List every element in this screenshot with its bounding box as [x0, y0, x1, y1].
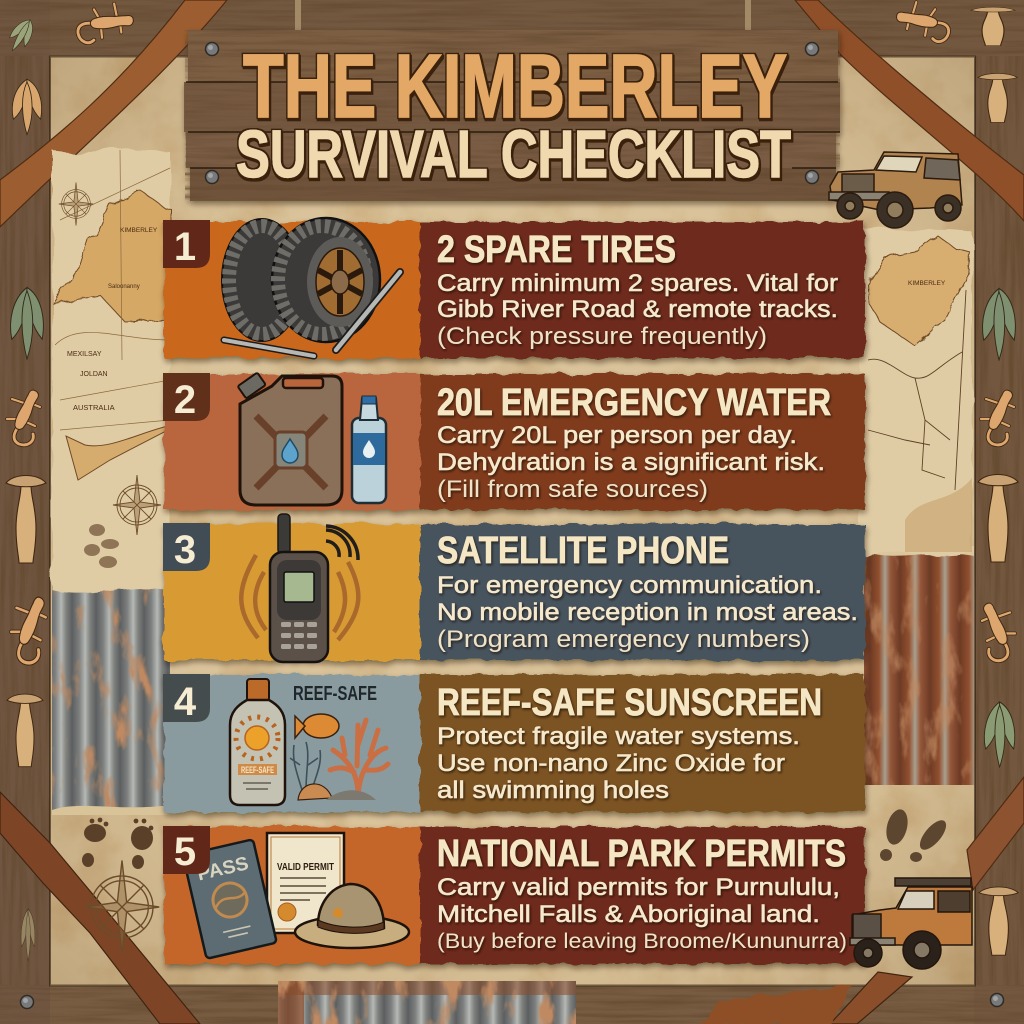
panel background: [164, 827, 865, 964]
text block: [437, 530, 858, 653]
body text: Carry 20L per person per day.: [437, 422, 797, 449]
number badge: [163, 826, 210, 874]
footprints bottom left: [82, 818, 153, 869]
panel: item 5 national park permits: [163, 826, 865, 964]
body text: Mitchell Falls & Aboriginal land.: [437, 901, 820, 928]
icon: baobab left: [6, 476, 46, 563]
leather strap bottom left: [0, 792, 200, 1024]
icon: baobab upper right: [978, 73, 1017, 122]
body text: all swimming holes: [437, 777, 669, 804]
title line 1: THE KIMBERLEY: [243, 37, 787, 137]
panel: item 1 spare tires: [163, 218, 865, 358]
text block: [437, 682, 822, 804]
icon: baobab lower right: [979, 887, 1018, 955]
body text: Carry minimum 2 spares. Vital for: [437, 270, 838, 297]
icon: leaf lower left: [21, 909, 35, 961]
body text: [437, 572, 858, 653]
icon: tires and wrench: [222, 218, 400, 356]
torn leather patch bottom: [700, 985, 853, 1024]
body text: [437, 874, 847, 953]
title line 2: SURVIVAL CHECKLIST: [236, 117, 791, 192]
icon: baobab left lower: [7, 694, 43, 767]
icon: coral: [330, 720, 388, 795]
ropes: [298, 0, 748, 42]
text block: [437, 833, 847, 953]
title sign: [184, 30, 840, 201]
panel background: [164, 524, 865, 660]
body text: No mobile reception in most areas.: [437, 599, 858, 626]
panel: item 2 emergency water: [163, 373, 865, 510]
number badge: [163, 674, 210, 724]
jeep top right: [829, 152, 962, 228]
nails: [206, 42, 818, 184]
icon: passport: [183, 839, 277, 959]
number badge: [163, 523, 210, 572]
leather strap right: [967, 777, 1024, 890]
number badge: [163, 373, 210, 422]
body text: For emergency communication.: [437, 572, 822, 599]
icon: leaves upper left: [12, 79, 42, 134]
number badge: [163, 220, 210, 269]
map label: JOLDAN: [80, 371, 108, 378]
number badge: 1: [174, 225, 196, 269]
left map: [52, 150, 172, 593]
body text: [437, 270, 838, 350]
heading: REEF-SAFE SUNSCREEN: [437, 682, 822, 724]
body text: (Check pressure frequently): [437, 323, 767, 350]
leather strap top left: [0, 0, 227, 227]
icon: ranger hat: [295, 884, 409, 948]
number badge: 3: [174, 528, 196, 572]
icon: lizard top right: [893, 0, 956, 50]
compass bottom left: [85, 860, 159, 954]
body text: (Fill from safe sources): [437, 476, 708, 503]
icon: leaves top left: [4, 15, 38, 56]
corrugated metal left: [52, 583, 170, 815]
heading: 20L EMERGENCY WATER: [437, 382, 831, 424]
footprints bottom right: [880, 807, 951, 862]
map label: MEXILSAY: [67, 351, 102, 358]
map label kimberley: KIMBERLEY: [908, 280, 946, 287]
icon: nail bottom right: [990, 994, 1004, 1006]
leather strap bottom centre right: [830, 972, 912, 1024]
text block: [437, 229, 838, 350]
jeep bottom right: [850, 878, 972, 969]
number badge: 4: [174, 680, 197, 724]
panel background: [164, 222, 865, 358]
icon: nail bottom left: [20, 996, 34, 1008]
heading: SATELLITE PHONE: [437, 530, 729, 572]
body text: [437, 422, 825, 503]
icon: baobab right: [978, 474, 1018, 562]
number badge: 5: [174, 830, 196, 874]
compass middle: [113, 475, 161, 535]
icon: passport: PASS: [195, 853, 251, 885]
icon: leaves right: [983, 288, 1015, 360]
map label kimberley: KIMBERLEY: [120, 227, 158, 234]
corrugated metal bottom: [278, 981, 576, 1024]
heading: 2 SPARE TIRES: [437, 229, 676, 271]
icon: lizard left lower: [11, 597, 46, 663]
icon: lizard right: [981, 390, 1014, 445]
map label: AUSTRALIA: [73, 403, 115, 412]
icon: leaves left: [11, 288, 43, 359]
icon: seaweed: [290, 742, 320, 790]
icon: leaves right lower: [984, 702, 1015, 767]
body text: (Buy before leaving Broome/Kununurra): [437, 929, 847, 953]
icon: valid permit document: [267, 833, 344, 933]
body text: Protect fragile water systems.: [437, 723, 800, 750]
number badge: 2: [174, 378, 196, 422]
icon: baobab top right: [971, 7, 1015, 46]
leather strap top right: [795, 0, 1024, 221]
panel: item 4 reef-safe sunscreen: [163, 674, 865, 812]
text block: [437, 382, 831, 503]
icon: jerry can and bottle: [238, 373, 386, 505]
panel background: [164, 675, 865, 812]
icon: fish: [295, 714, 339, 738]
icon: shell and rocks: [298, 784, 376, 800]
icon: lizard left: [7, 390, 40, 445]
panel background: [164, 374, 865, 510]
body text: [437, 723, 800, 804]
icon: valid permit document: VALID PERMIT: [277, 861, 334, 873]
icon: sunscreen bottle: REEF-SAFE: [241, 765, 274, 775]
stains on map: [84, 524, 119, 568]
compass small: [59, 182, 93, 226]
heading: NATIONAL PARK PERMITS: [437, 833, 846, 875]
right map: [860, 228, 972, 556]
body text: (Program emergency numbers): [437, 626, 810, 653]
label reef-safe: REEF-SAFE: [293, 683, 377, 705]
panel: item 3 satellite phone: [163, 514, 865, 662]
icon: satellite phone with signal: [241, 514, 358, 662]
body text: Carry valid permits for Purnululu,: [437, 874, 840, 901]
icon: lizard right lower: [982, 603, 1015, 661]
map label: Saloonanny: [108, 284, 140, 290]
icon: lizard top left: [71, 0, 136, 52]
body text: Gibb River Road & remote tracks.: [437, 296, 838, 323]
corrugated metal right: [864, 546, 974, 785]
wooden planks: [184, 30, 840, 201]
icon: sunscreen bottle: [230, 679, 285, 805]
body text: Use non-nano Zinc Oxide for: [437, 750, 785, 777]
body text: Dehydration is a significant risk.: [437, 449, 825, 476]
